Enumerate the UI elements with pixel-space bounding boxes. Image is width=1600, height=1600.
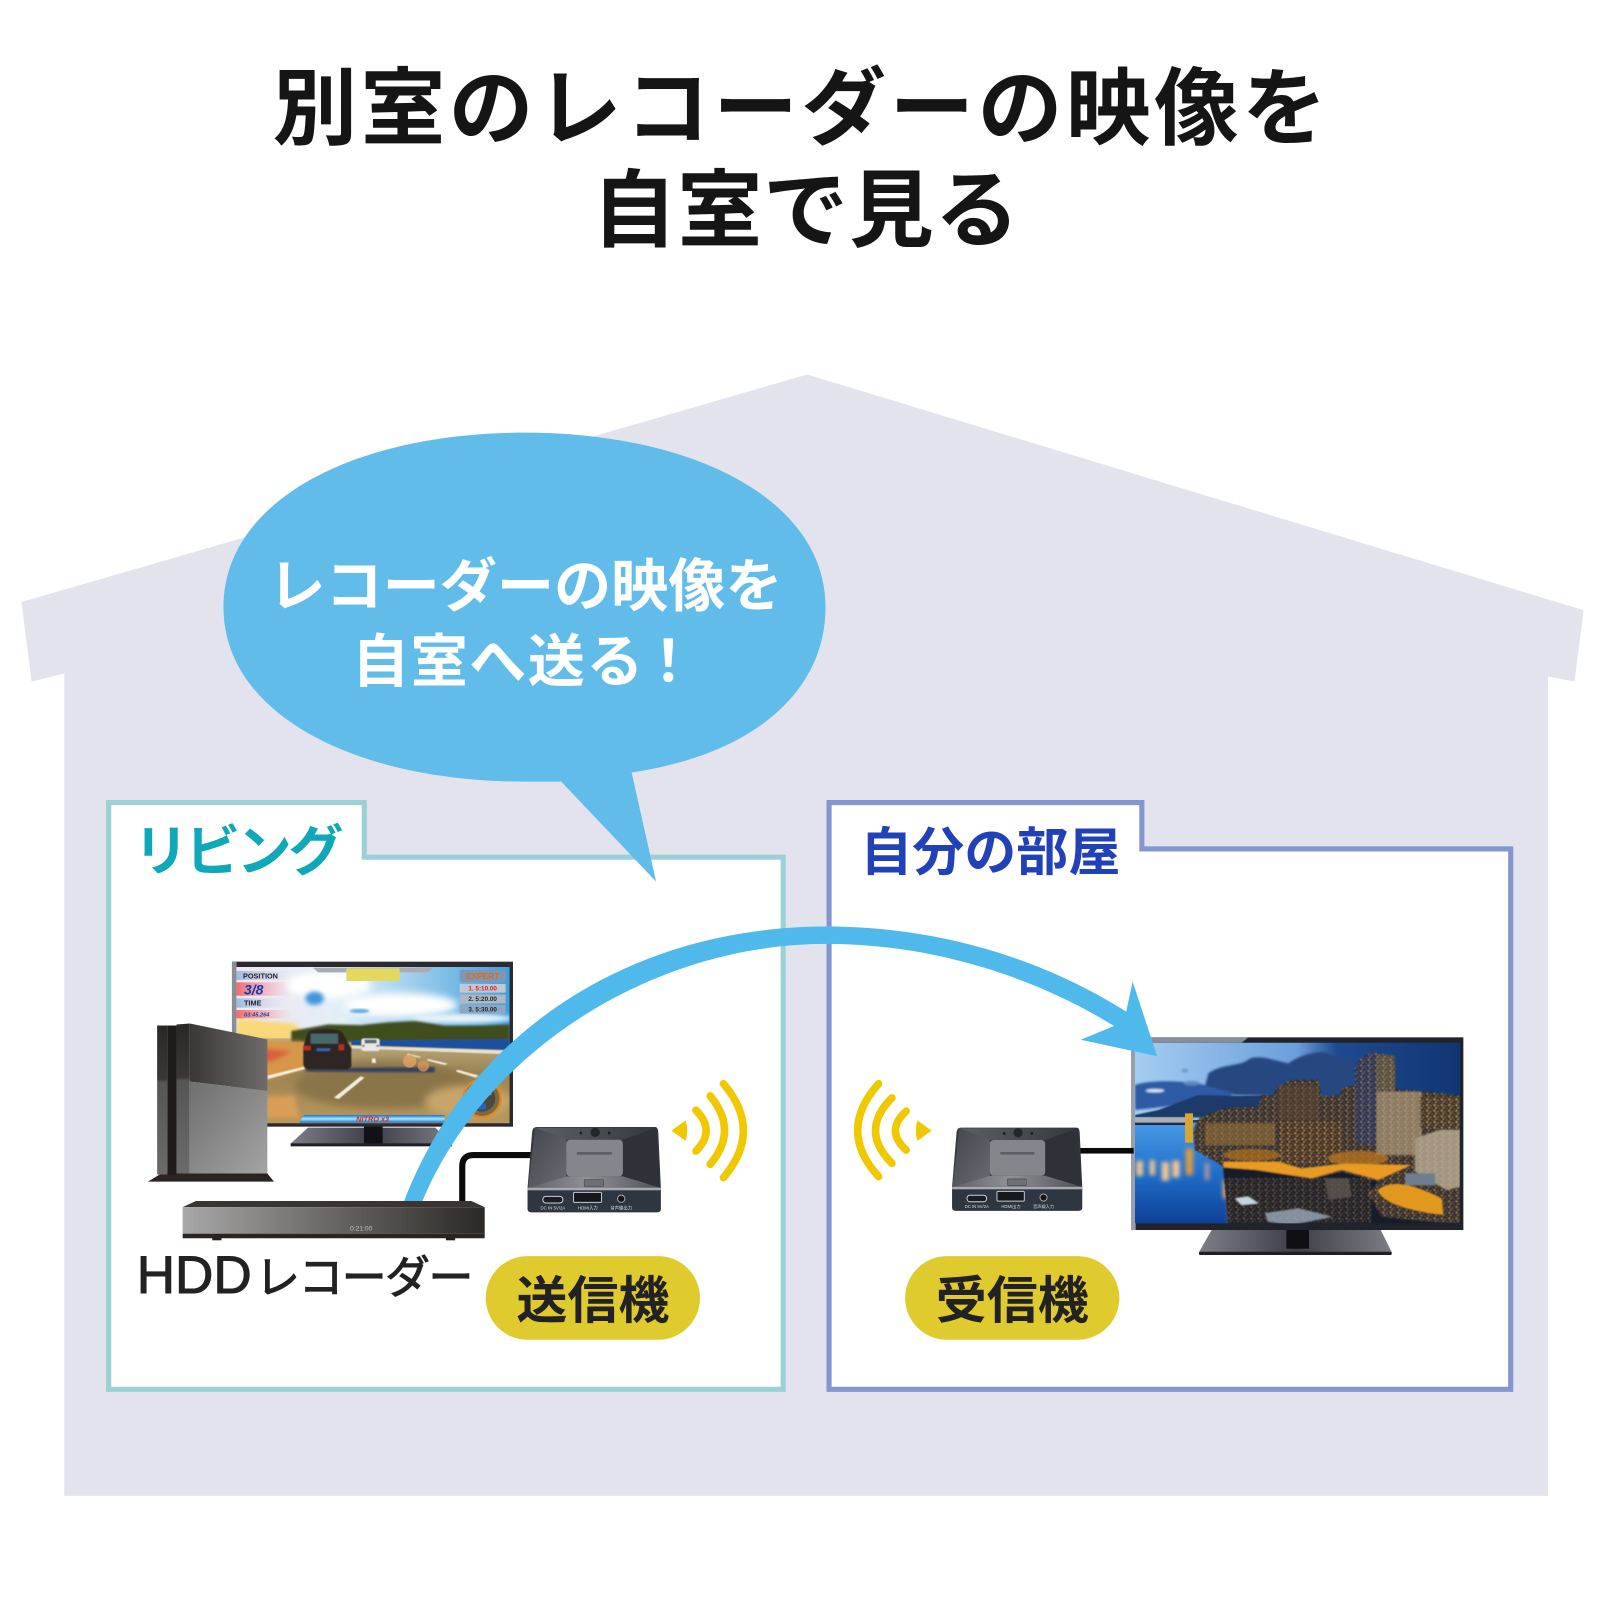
race hud left: 3/8 bbox=[244, 981, 264, 997]
cable: receiver to tv bbox=[1077, 1148, 1134, 1154]
device top facets bbox=[952, 1128, 1082, 1189]
device ports: HDMI入力 bbox=[578, 1204, 598, 1211]
hdd recorder bbox=[183, 1201, 485, 1240]
badge: receiver: 受信機 bbox=[936, 1272, 1089, 1329]
title: 別室のレコーダーの映像を bbox=[272, 61, 1330, 156]
signal arrow bbox=[404, 927, 1157, 1201]
badge: transmitter: 送信機 bbox=[516, 1272, 669, 1329]
device top facets bbox=[528, 1128, 661, 1190]
night city screen bbox=[1135, 1043, 1460, 1230]
speed gauge bbox=[463, 1080, 501, 1117]
heading: own room: 自分の部屋 bbox=[860, 824, 1120, 882]
hdd recorder: 0:21:00 bbox=[350, 1226, 373, 1233]
nitro bar: NITRO x3 bbox=[356, 1114, 389, 1123]
car: dark bbox=[303, 1029, 351, 1069]
game console bbox=[148, 1023, 274, 1182]
bubble text bbox=[268, 555, 783, 695]
transmitter device bbox=[528, 1127, 661, 1212]
title bbox=[272, 61, 1330, 258]
water reflections bbox=[1136, 1148, 1229, 1198]
house background bbox=[21, 374, 1584, 1496]
title: 自室で見る bbox=[592, 163, 1020, 258]
label: hdd recorder bbox=[137, 1246, 472, 1305]
device ports: 音声線出力 bbox=[610, 1204, 632, 1211]
race hud right: 3. 5:30.00 bbox=[468, 1006, 497, 1013]
label: hdd recorder: レコーダー bbox=[255, 1252, 472, 1303]
bubble text: 自室へ送る bbox=[352, 631, 645, 695]
car: white bbox=[361, 1038, 380, 1051]
device ports: 音声線入力 bbox=[1033, 1203, 1054, 1210]
device ports: HDMI出力 bbox=[1001, 1203, 1021, 1210]
icon: wireless waves receiver bbox=[858, 1084, 932, 1177]
panel: own room bbox=[829, 803, 1511, 1389]
device ports bbox=[965, 1191, 1054, 1210]
television with night city screen bbox=[1131, 1037, 1463, 1255]
icon: wireless waves transmitter bbox=[671, 1084, 743, 1178]
top centre hud bbox=[313, 968, 433, 981]
label: hdd recorder: HDD bbox=[137, 1246, 252, 1305]
receiver device bbox=[952, 1128, 1082, 1211]
race hud right: 2. 5:20.00 bbox=[468, 996, 497, 1003]
race hud left: POSITION bbox=[243, 971, 278, 980]
device ports bbox=[540, 1192, 632, 1211]
tv stand bbox=[291, 1125, 452, 1146]
bridge bbox=[1135, 1113, 1200, 1143]
device ports: DC IN 5V/2A bbox=[540, 1205, 565, 1210]
race hud right bbox=[460, 970, 506, 1014]
clouds bbox=[1135, 1052, 1355, 1110]
badge: transmitter bbox=[486, 1256, 700, 1340]
television with game screen bbox=[232, 962, 513, 1146]
tv stand bbox=[1199, 1229, 1392, 1255]
heading: living room: リビング bbox=[134, 820, 342, 882]
race hud right: 1. 5:10.00 bbox=[468, 986, 497, 993]
bubble text: レコーダーの映像を bbox=[268, 555, 783, 619]
race hud right: EXPERT bbox=[466, 971, 499, 981]
race hud left: 03:45.264 bbox=[244, 1012, 270, 1018]
waterfront bbox=[1223, 1162, 1460, 1225]
bubble text: ！ bbox=[640, 631, 698, 695]
road markings bbox=[267, 1054, 479, 1099]
race hud left bbox=[236, 971, 293, 1018]
cable: recorder to transmitter bbox=[462, 1155, 536, 1204]
badge: receiver bbox=[905, 1256, 1119, 1340]
nitro bar bbox=[299, 1115, 445, 1123]
city buildings bbox=[1193, 1052, 1460, 1223]
race hud left: TIME bbox=[244, 999, 262, 1008]
speech bubble bbox=[223, 433, 826, 882]
panel: living room bbox=[109, 803, 783, 1389]
game screen bbox=[236, 967, 511, 1123]
device ports: DC IN 5V/2A bbox=[965, 1204, 989, 1209]
